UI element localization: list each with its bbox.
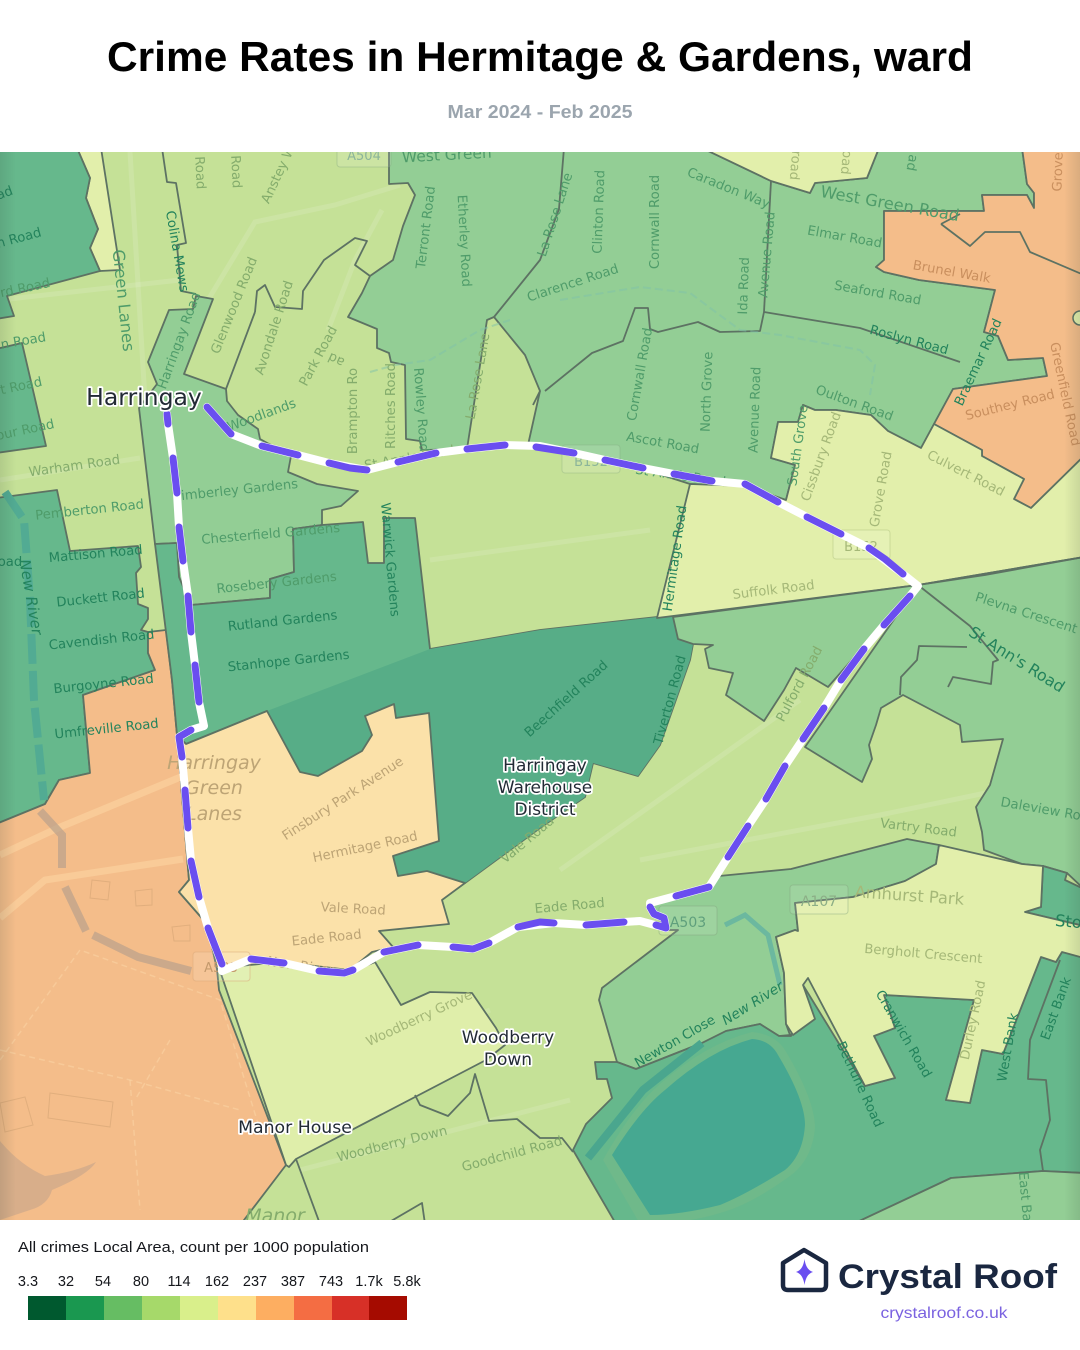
road labels: New River [719, 978, 788, 1029]
new river: grey and teal segments [0, 492, 780, 1220]
legend tick labels: 3.3 [18, 1274, 38, 1290]
road labels: Woodberry Grove [364, 988, 475, 1050]
road labels: Vale Road [498, 814, 558, 867]
legend tick labels: 80 [133, 1274, 149, 1290]
road labels: Woodberry Down [335, 1124, 449, 1166]
internal boundary lines [162, 148, 1080, 1224]
legend tick labels: 5.8k [393, 1274, 421, 1290]
road labels: St Ann's Road [363, 443, 456, 474]
road labels: Ritches Road [384, 363, 399, 449]
road labels: Rowley Road [410, 367, 431, 452]
road labels: Stanhope Gardens [227, 648, 350, 675]
legend tick labels: 162 [205, 1274, 229, 1290]
legend tick labels [18, 1274, 421, 1290]
road labels: Hermitage Road [661, 505, 690, 612]
road number signs: A503 [670, 915, 706, 931]
road labels: Eade Road [534, 896, 605, 917]
place labels [86, 383, 592, 1138]
road labels: Plevna Crescent [973, 590, 1079, 637]
road labels: Ascot Road [625, 430, 700, 457]
road labels: Durley Road [958, 979, 989, 1061]
logo url: crystalroof.co.uk [880, 1305, 1009, 1322]
road labels: Ida Road [736, 257, 753, 315]
road labels: Eade Road [291, 927, 362, 950]
road labels: Lanes [186, 803, 242, 825]
logo wordmark: Crystal Roof [838, 1258, 1058, 1296]
road labels: Anstey W [259, 143, 299, 206]
road labels: St Ann's Road [966, 622, 1068, 696]
road labels: n Road [0, 330, 47, 353]
road labels: Brampton Ro [346, 368, 361, 454]
road labels: Suffolk Road [732, 578, 815, 603]
road labels: Caradon Way [685, 165, 772, 212]
road labels: Goodchild Road [460, 1134, 564, 1175]
road labels: Pemberton Road [35, 497, 145, 524]
road labels: Brunel Walk [912, 258, 992, 287]
road labels: East Bank [1038, 975, 1075, 1042]
road labels: Daleview Ro [999, 795, 1080, 824]
road labels: Road [191, 156, 208, 190]
place: Woodberry Down: Down [484, 1050, 532, 1070]
logo: Crystal Roof [783, 1250, 1058, 1322]
road labels: Road [227, 155, 244, 189]
road labels: road [786, 150, 803, 181]
subtitle: date range: Mar 2024 - Feb 2025 [448, 102, 632, 122]
road labels: West Green [401, 144, 492, 166]
road labels: Amhurst Park [854, 882, 965, 909]
road labels: Woodlands [225, 396, 298, 435]
road labels: Warwick Gardens [377, 502, 402, 617]
road labels: Warham Road [28, 453, 121, 480]
road labels: West Bank [995, 1011, 1022, 1083]
road labels: Mattison Road [48, 543, 143, 566]
legend title: All crimes Local Area, count per 1000 population [18, 1240, 369, 1256]
road labels: Culvert Road [924, 448, 1007, 500]
road labels: oad [837, 149, 854, 175]
road labels: Avenue Road [747, 367, 765, 453]
road labels: Avondale Road [252, 279, 297, 377]
road labels: imberley Gardens [180, 477, 299, 504]
route: purple dashes [167, 407, 910, 973]
road number signs: A504 [347, 149, 381, 164]
road labels: t Road [0, 375, 44, 398]
road labels: Braemar Road [952, 317, 1006, 408]
road labels: Umfreville Road [54, 717, 159, 742]
orange park roads [0, 776, 183, 918]
legend colour scale [28, 1296, 407, 1320]
road labels: Grove [1050, 152, 1067, 192]
reservoir lake [588, 1032, 815, 1224]
road labels: Rutland Gardens [227, 608, 338, 635]
legend tick labels: 387 [281, 1274, 305, 1290]
route: white casing [167, 407, 918, 973]
legend tick labels: 114 [167, 1274, 191, 1290]
road number signs: B152 [844, 540, 878, 555]
place: Woodberry Down: Woodberry [462, 1028, 554, 1048]
road labels: rd Road [0, 276, 52, 301]
road labels: Newton Close [632, 1013, 718, 1071]
road labels: Avenue Road [756, 211, 779, 298]
road labels: Roslyn Road [868, 323, 950, 358]
road labels: Harringay Road [155, 290, 204, 391]
title: Crime Rates in Hermitage & Gardens, ward [107, 33, 973, 80]
road labels: Vale Road [320, 900, 386, 919]
road labels: Park Road [297, 324, 341, 389]
place: Woodberry Down [462, 1028, 554, 1070]
road labels: La Rose Lane [464, 332, 494, 421]
road labels: Oulton Road [813, 383, 895, 425]
road labels: West Green Road [819, 182, 961, 225]
road number signs: A107 [801, 894, 837, 910]
road labels: Cissbury Road [799, 410, 845, 503]
road labels: Beechfield Road [522, 658, 611, 741]
road network [0, 152, 1000, 1170]
road labels: Burgoyne Road [53, 672, 154, 697]
road labels: Green [185, 777, 243, 799]
road labels: Colina Mews [162, 210, 191, 293]
legend [18, 1240, 421, 1320]
road labels: South Grove [785, 404, 812, 487]
road labels: New River [266, 954, 335, 979]
road labels: Etherley Road [454, 194, 473, 287]
road labels: Pulford Road [774, 644, 826, 725]
legend tick labels: 54 [95, 1274, 111, 1290]
road labels: Cavendish Road [48, 628, 155, 654]
place: Harringay: Harringay [86, 383, 202, 411]
legend tick labels: 32 [58, 1274, 74, 1290]
road labels: Clinton Road [591, 170, 608, 254]
road labels: Terront Road [414, 185, 439, 271]
legend tick labels: 1.7k [355, 1274, 383, 1290]
road labels: Tiverton Road [651, 654, 690, 747]
road labels: Finsbury Park Avenue [280, 754, 406, 844]
road number signs: B152 [574, 455, 608, 470]
road labels: Bethune Road [833, 1039, 886, 1130]
road labels: Chesterfield Gardens [201, 521, 341, 548]
road labels: Glenwood Road [209, 255, 261, 356]
road labels: St Ann's Road [634, 463, 727, 490]
road labels: Manor [245, 1205, 306, 1227]
road labels: La Rose Lane [535, 171, 576, 259]
road labels: ad [326, 349, 347, 369]
place: Harringay Warehouse District: Warehouse [498, 778, 592, 798]
road number signs [193, 142, 890, 981]
road labels: Rosebery Gardens [216, 570, 338, 597]
road labels: Cornwall Road [625, 327, 656, 422]
road labels: New River [15, 558, 47, 637]
road labels: Duckett Road [56, 586, 146, 611]
road labels: Cornwall Road [648, 175, 663, 269]
road labels: Green Lanes [109, 249, 138, 352]
legend tick labels: 743 [319, 1274, 343, 1290]
ward boundary route [167, 407, 918, 973]
place: Manor House: Manor House [238, 1118, 352, 1138]
road labels: ad [903, 153, 920, 172]
road labels: Southey Road [964, 387, 1056, 424]
road labels: Seaford Road [833, 279, 922, 309]
road labels: Elmar Road [806, 224, 883, 252]
legend tick labels: 237 [243, 1274, 267, 1290]
road labels: East Ba [1015, 1171, 1034, 1222]
road labels: North Grove [699, 351, 716, 432]
small circular feature [1073, 311, 1080, 325]
road labels: Clarence Road [525, 262, 621, 306]
road labels: Cranwich Road [872, 988, 934, 1081]
icon: house with star [783, 1250, 826, 1290]
choropleth regions [0, 148, 1080, 1224]
place: Harringay Warehouse District: District [514, 800, 576, 820]
road labels: Harringay [167, 752, 262, 774]
road labels: Hermitage Road [312, 829, 419, 866]
road labels: Bergholt Crescent [864, 942, 983, 967]
place: Harringay Warehouse District: Harringay [503, 756, 587, 776]
road labels: Grove Road [868, 450, 896, 528]
road labels: Vartry Road [879, 816, 958, 841]
place: Harringay Warehouse District [498, 756, 592, 820]
road number signs: A503 [204, 961, 238, 976]
